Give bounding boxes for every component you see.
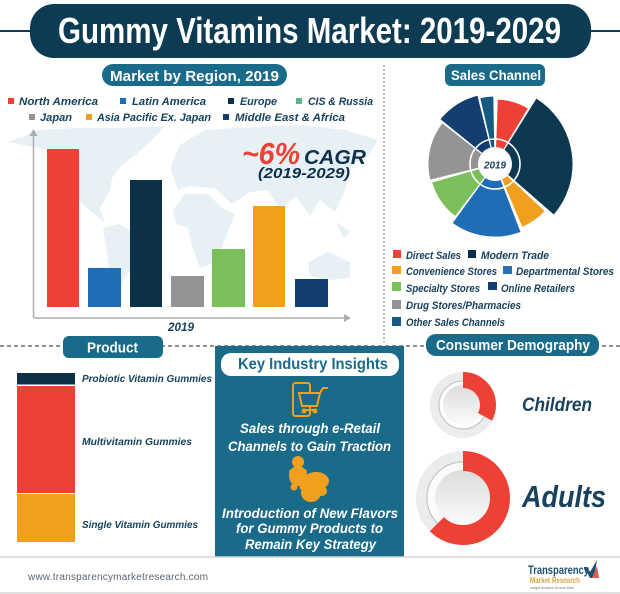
heading: sales channel	[445, 64, 545, 86]
label: adults: Adults	[521, 479, 606, 514]
panel: product	[17, 336, 212, 542]
donut: children	[430, 372, 496, 438]
callout: CAGR	[242, 136, 367, 182]
legend: regions: Asia Pacific Ex. Japan	[96, 112, 211, 124]
legend: sales channels	[392, 250, 614, 329]
legend: sales channels: Convenience Stores	[406, 266, 497, 278]
text: e-retail insight: Channels to Gain Traction	[228, 439, 391, 454]
text: new flavors insight: Remain Key Strategy	[245, 537, 377, 552]
world map background	[8, 125, 378, 294]
heading: key industry insights: Key Industry Insights	[238, 356, 388, 373]
bar chart: regions: 2019	[167, 322, 195, 334]
logo: transparency market research	[528, 560, 599, 590]
heading: market by region: Market by Region, 2019	[110, 69, 279, 85]
icon: gummy bears	[289, 456, 329, 502]
label: children: Children	[522, 395, 592, 416]
donut: adults	[416, 451, 510, 545]
labels: product: Single Vitamin Gummies	[82, 520, 198, 531]
pie chart: sales channel: 2019	[483, 160, 506, 172]
title	[30, 4, 591, 58]
labels: product	[82, 374, 212, 531]
legend: sales channels: Specialty Stores	[406, 283, 480, 295]
legend: sales channels: Direct Sales	[406, 250, 461, 262]
text: new flavors insight	[222, 506, 398, 552]
legend: regions: Europe	[240, 96, 277, 108]
legend: regions: CIS & Russia	[308, 96, 373, 108]
heading: key industry insights	[221, 353, 399, 376]
heading: market by region	[102, 64, 287, 86]
heading: product	[63, 336, 163, 358]
heading: consumer demography: Consumer Demography	[436, 338, 590, 354]
icon: phone and shopping cart	[293, 383, 328, 416]
labels: product: Multivitamin Gummies	[82, 437, 192, 448]
legend: regions	[8, 96, 373, 124]
legend: sales channels: Other Sales Channels	[406, 317, 505, 329]
legend: regions: Japan	[40, 112, 72, 124]
text: e-retail insight	[228, 421, 391, 454]
legend: sales channels: Drug Stores/Pharmacies	[406, 300, 521, 312]
panel: sales channel	[392, 64, 614, 329]
callout: CAGR: ~6%	[242, 136, 300, 171]
bar chart: regions	[30, 129, 351, 334]
legend: regions: Latin America	[132, 96, 206, 108]
heading: consumer demography	[426, 334, 599, 356]
callout: CAGR: CAGR	[304, 147, 367, 169]
logo: transparency market research: Market Research	[530, 576, 580, 585]
legend: sales channels: Online Retailers	[501, 283, 575, 295]
text: new flavors insight: for Gummy Products to	[236, 521, 383, 536]
panel: consumer demography	[416, 334, 606, 545]
pie chart: sales channel	[428, 95, 573, 237]
footer url: www.transparencymarketresearch.com	[27, 572, 208, 583]
heading: product: Product	[87, 340, 138, 356]
legend: regions: North America	[19, 96, 98, 108]
labels: product: Probiotic Vitamin Gummies	[82, 374, 212, 385]
text: new flavors insight: Introduction of New Flavors	[222, 506, 398, 521]
heading: sales channel: Sales Channel	[451, 68, 541, 83]
callout: CAGR: (2019-2029)	[258, 165, 350, 182]
text: e-retail insight: Sales through e-Retail	[240, 421, 380, 436]
logo: transparency market research: Insight Analysis Growth Rate	[530, 586, 574, 590]
panel: key industry insights	[215, 346, 404, 557]
legend: sales channels: Modern Trade	[481, 250, 549, 262]
panel: market by region	[8, 64, 378, 334]
stacked bar: product	[17, 373, 75, 542]
legend: regions: Middle East & Africa	[235, 112, 345, 124]
logo: transparency market research: Transparency	[528, 565, 589, 577]
